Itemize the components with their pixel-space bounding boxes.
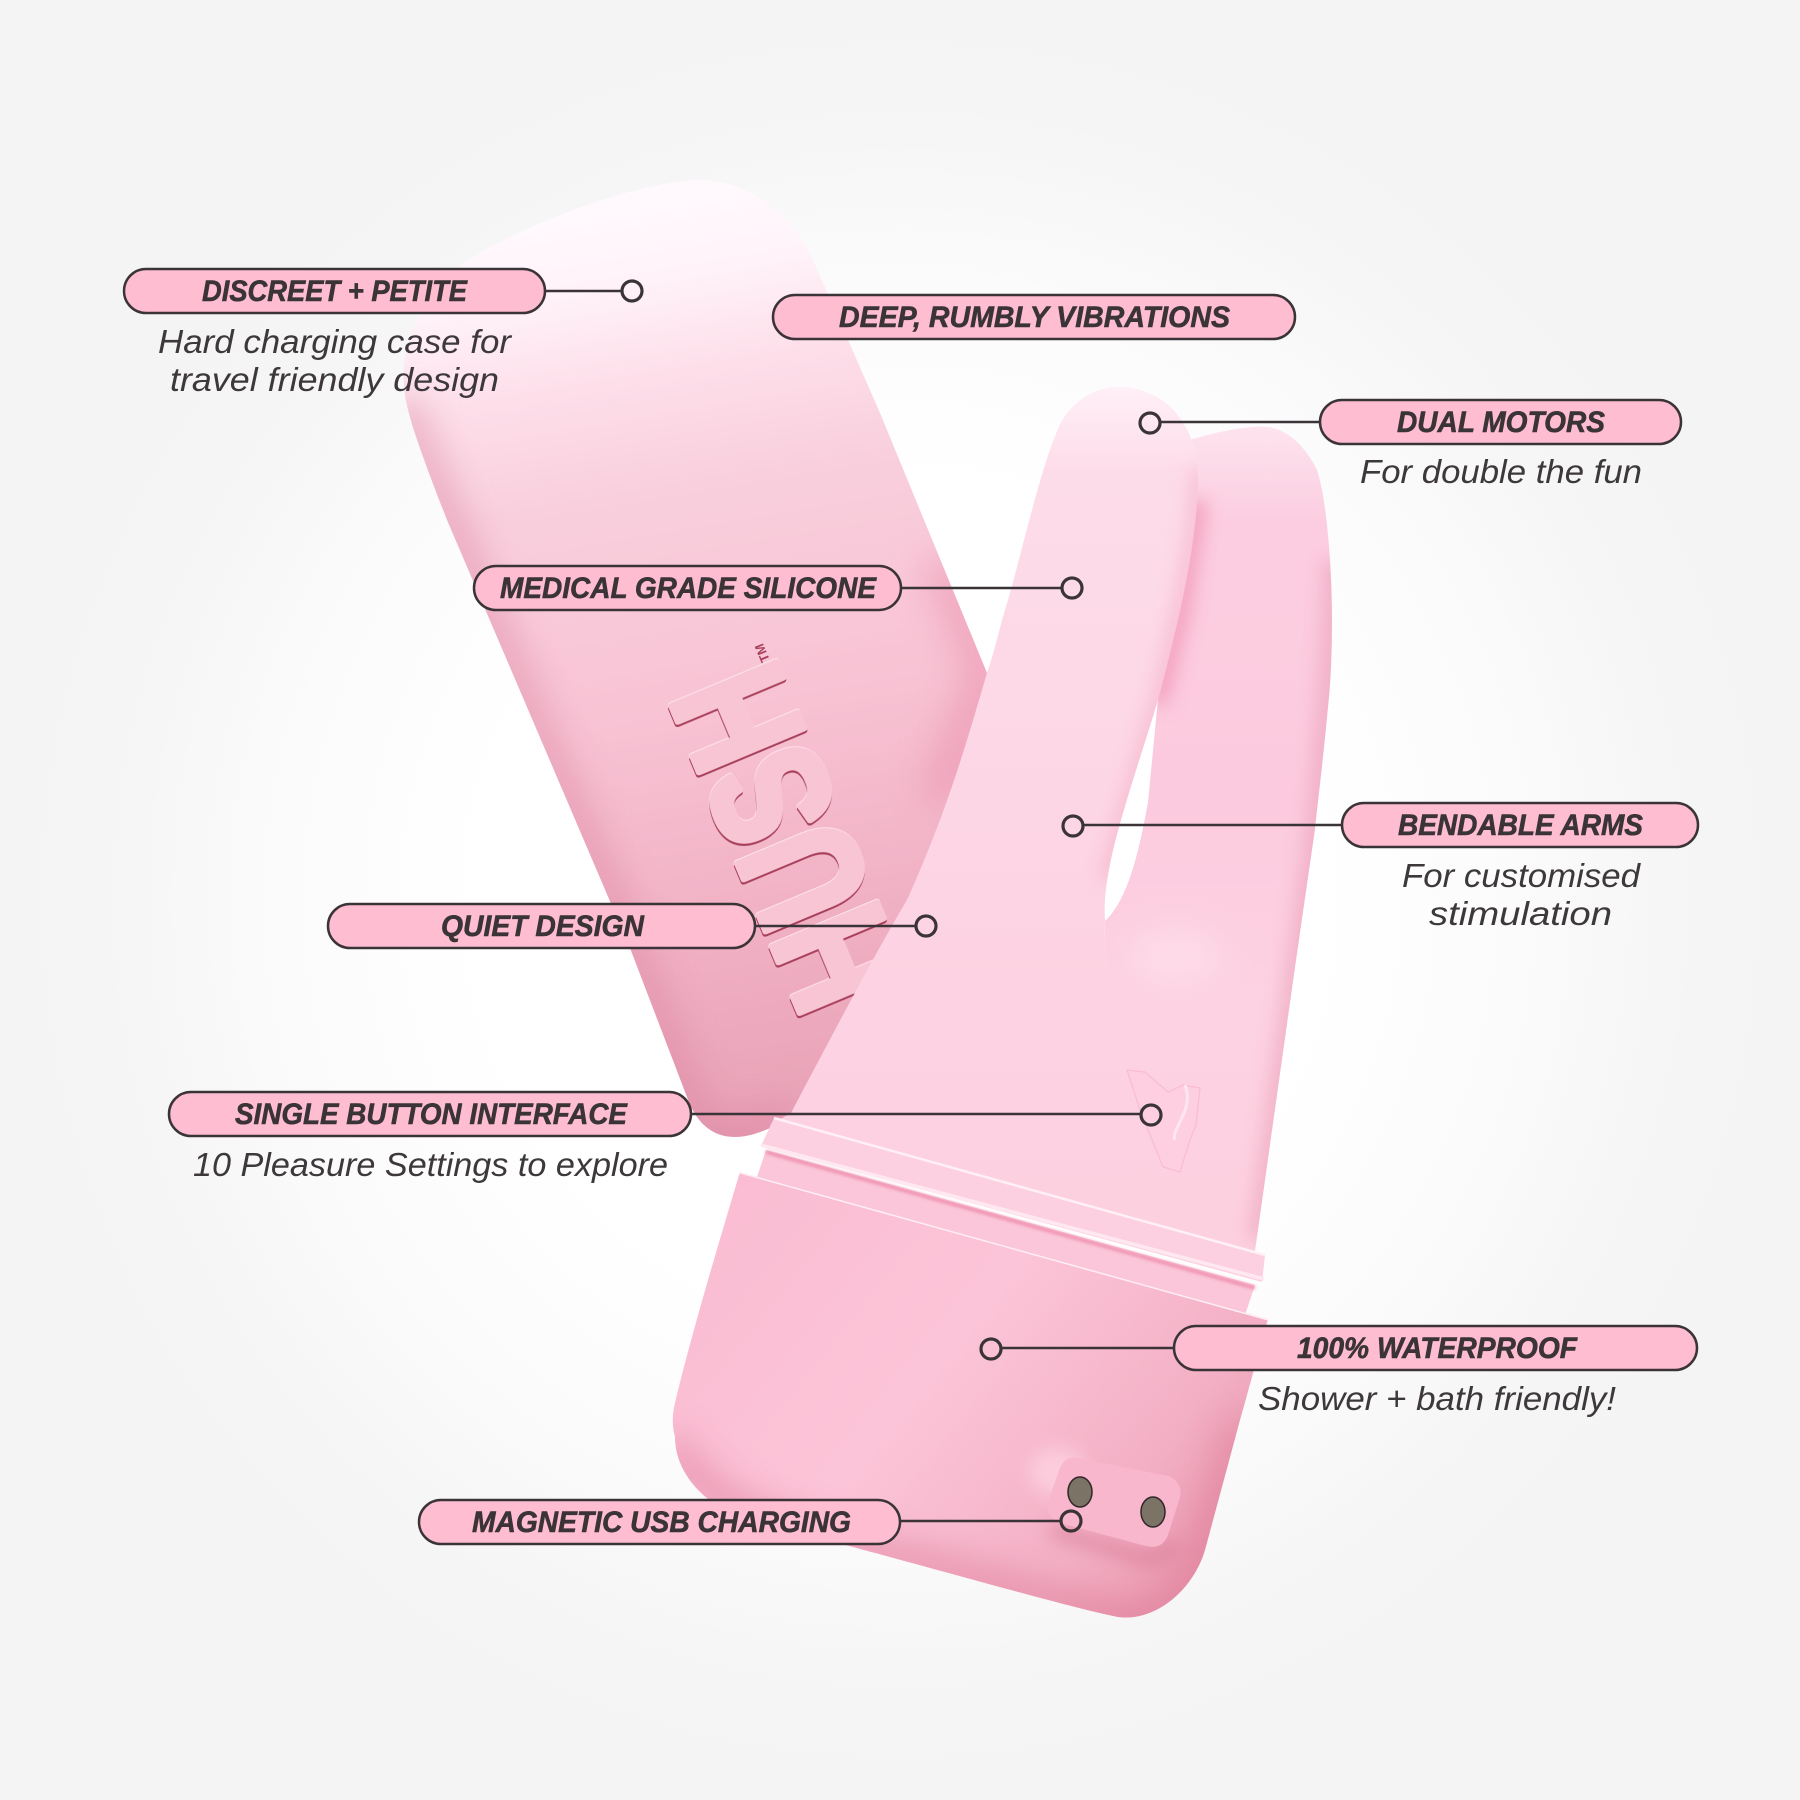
marker	[622, 281, 642, 301]
heading: MEDICAL GRADE SILICONE	[500, 572, 877, 605]
pill	[1342, 803, 1698, 847]
product: vibrator	[672, 387, 1335, 1620]
pill	[1320, 400, 1681, 444]
pill	[419, 1500, 900, 1544]
connector	[545, 290, 622, 292]
marker	[1061, 1511, 1081, 1531]
front arm shading	[1108, 470, 1200, 880]
connector	[1083, 824, 1342, 826]
callout: medical grade silicone	[474, 566, 1082, 610]
front arm and body	[770, 387, 1198, 1230]
connector	[901, 587, 1062, 589]
pill	[474, 566, 901, 610]
connector	[691, 1113, 1141, 1115]
callout: 100% waterproof	[981, 1326, 1697, 1417]
trademark: TM	[752, 642, 773, 665]
case edge shading	[400, 400, 987, 1137]
pill	[169, 1092, 691, 1136]
heading: MAGNETIC USB CHARGING	[472, 1506, 851, 1539]
base shading	[672, 1172, 1268, 1620]
description line 1: Hard charging case for	[158, 323, 513, 360]
button highlight	[1174, 1085, 1187, 1140]
callout: magnetic usb charging	[419, 1500, 1081, 1544]
pill	[773, 295, 1295, 339]
pill	[328, 904, 755, 948]
marker	[1063, 816, 1083, 836]
heading: QUIET DESIGN	[441, 910, 645, 943]
button logo	[1127, 1070, 1200, 1172]
description line 2: travel friendly design	[170, 361, 499, 398]
heading: DISCREET + PETITE	[202, 275, 468, 308]
description line 2: stimulation	[1429, 895, 1612, 932]
rear arm	[1100, 427, 1332, 1258]
callout: deep, rumbly vibrations	[773, 295, 1295, 339]
marker	[1062, 578, 1082, 598]
magnet left	[1068, 1477, 1092, 1507]
product: hard charging case	[400, 180, 987, 1137]
crotch highlight	[1129, 931, 1221, 979]
connector	[1001, 1347, 1174, 1349]
base	[673, 1172, 1268, 1617]
marker	[981, 1339, 1001, 1359]
marker	[916, 916, 936, 936]
callout: single button interface	[169, 1092, 1161, 1183]
case body	[404, 180, 987, 1137]
marker	[1140, 413, 1160, 433]
description: 10 Pleasure Settings to explore	[193, 1146, 668, 1183]
button mark	[1127, 1070, 1200, 1172]
magnet right	[1141, 1497, 1165, 1527]
description line 1: For customised	[1402, 857, 1642, 894]
connector	[755, 925, 916, 927]
callout: dual motors	[1140, 400, 1681, 490]
pill	[124, 269, 545, 313]
port highlight	[1029, 1448, 1085, 1496]
charging port	[1029, 1448, 1180, 1560]
heading: DEEP, RUMBLY VIBRATIONS	[839, 301, 1230, 334]
embossed logo: HUSH	[635, 641, 940, 1034]
heading: DUAL MOTORS	[1397, 406, 1605, 439]
pill	[1174, 1326, 1697, 1370]
port shadow	[1050, 1530, 1178, 1560]
rear arm shading	[1157, 500, 1335, 1240]
heading: SINGLE BUTTON INTERFACE	[235, 1098, 628, 1131]
callout: bendable arms	[1063, 803, 1698, 932]
description: For double the fun	[1360, 453, 1642, 490]
collar band	[761, 1118, 1265, 1282]
heading: 100% WATERPROOF	[1297, 1332, 1578, 1365]
heading: BENDABLE ARMS	[1398, 809, 1643, 842]
connector	[1160, 421, 1320, 423]
marker	[1141, 1105, 1161, 1125]
connector	[900, 1520, 1061, 1522]
callout: quiet design	[328, 904, 936, 948]
description: Shower + bath friendly!	[1258, 1380, 1616, 1417]
callout: discreet + petite	[124, 269, 642, 398]
port plate	[1048, 1458, 1180, 1547]
neck	[756, 1150, 1255, 1315]
collar highlights	[761, 1118, 1265, 1288]
